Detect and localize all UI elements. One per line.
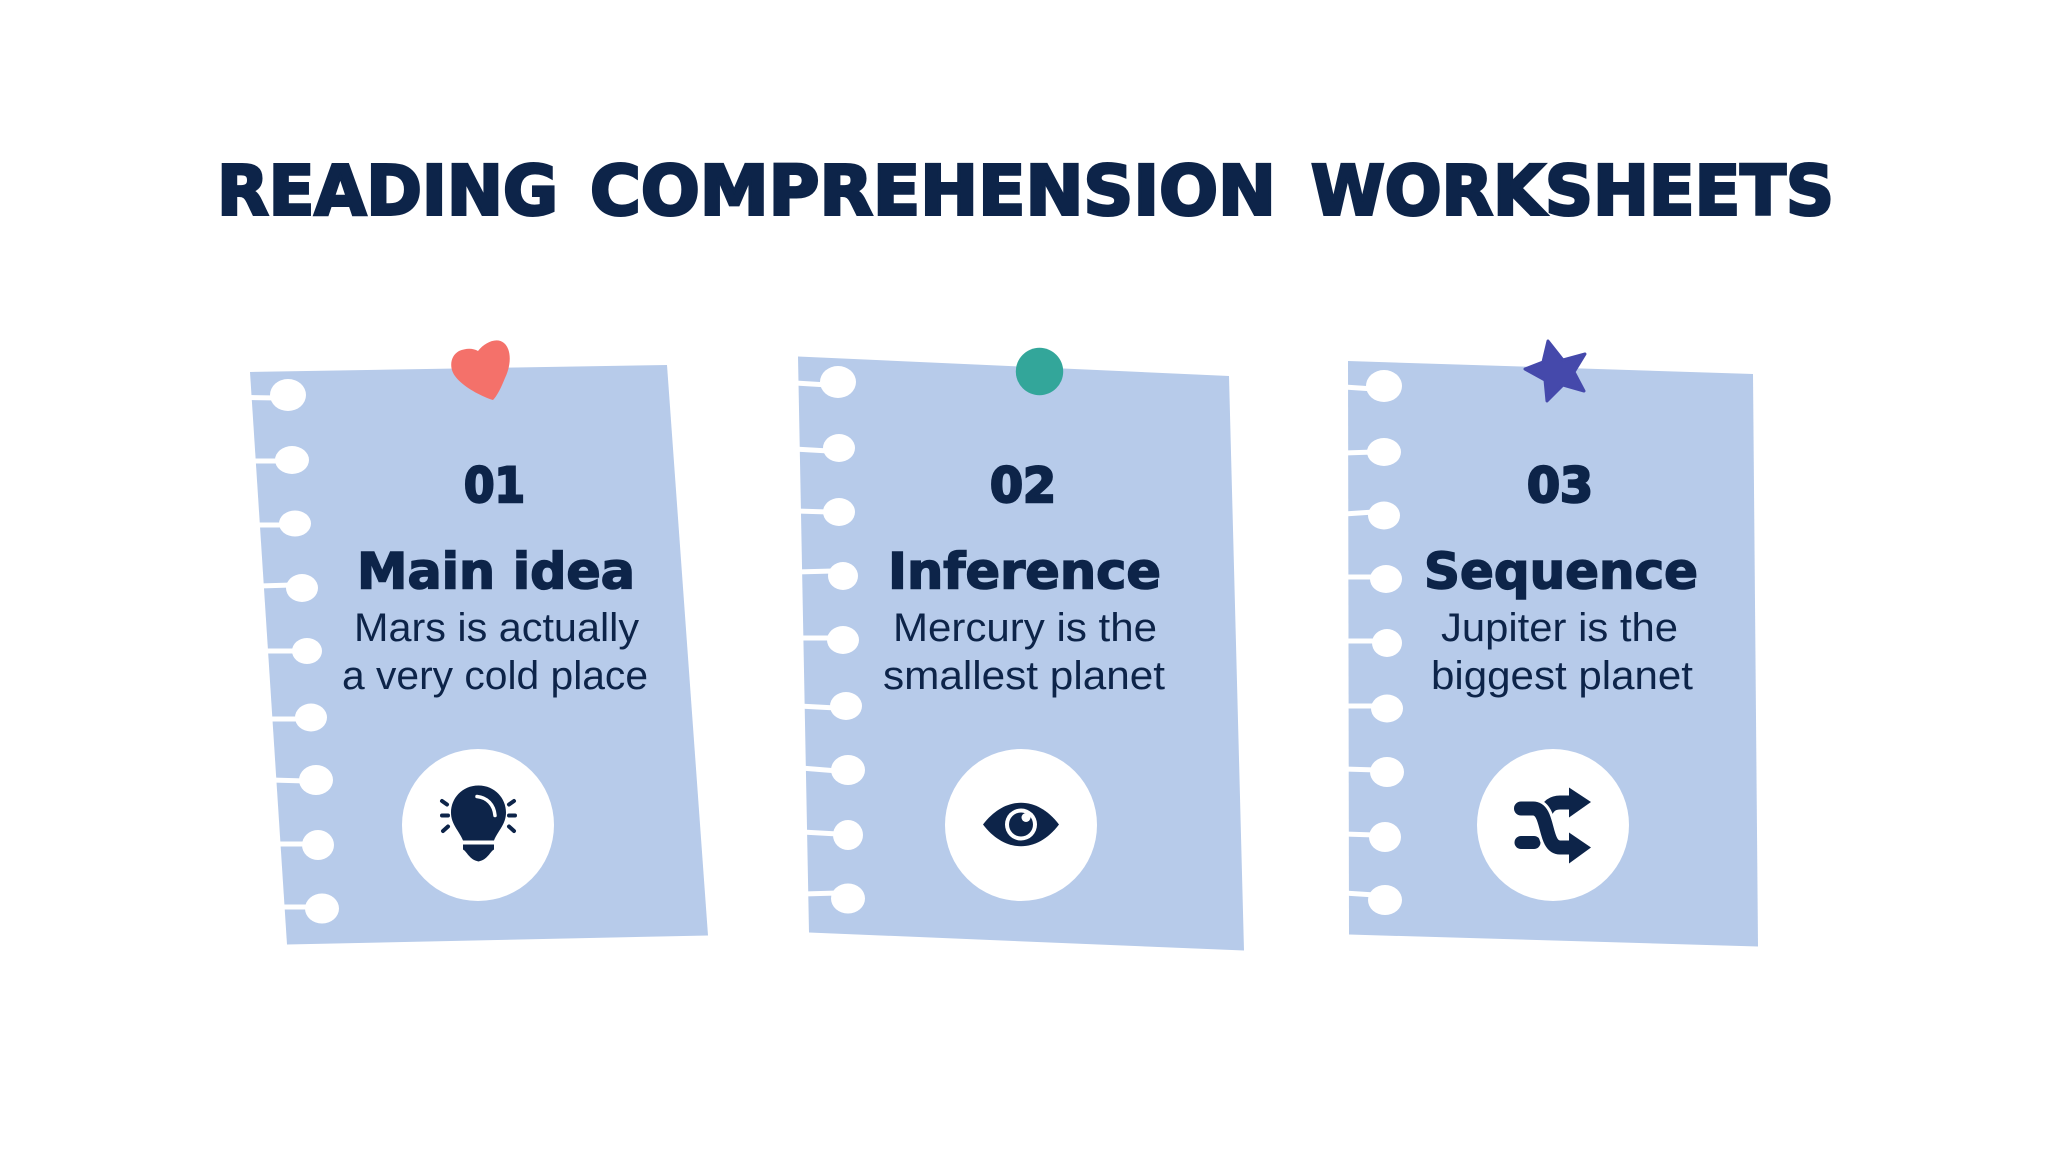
- panel: card 01 main idea: [248, 340, 708, 944]
- panel: card 03 sequence: [1344, 341, 1758, 946]
- icon: teal circle pin: [1016, 348, 1063, 395]
- description 2: smallest planet: [883, 654, 1165, 698]
- icon: light bulb in circle: [402, 749, 554, 901]
- heading: sequence: Sequence: [1424, 542, 1698, 600]
- description 1: a very cold place: [342, 654, 648, 698]
- description 2: Mercury is the: [893, 606, 1157, 650]
- icon: star pin: [1525, 341, 1585, 401]
- heading: inference: Inference: [888, 542, 1161, 600]
- description 1: [342, 606, 648, 698]
- number 01: 01: [464, 458, 525, 514]
- description 3: Jupiter is the: [1441, 606, 1678, 650]
- description 3: [1431, 606, 1693, 698]
- title: READING: [217, 152, 558, 232]
- number 03: 03: [1527, 458, 1593, 514]
- description 2: [883, 606, 1165, 698]
- description 1: Mars is actually: [354, 606, 639, 650]
- binder holes 2: [794, 366, 865, 914]
- description 3: biggest planet: [1431, 654, 1693, 698]
- title: COMPREHENSION: [590, 152, 1276, 232]
- paper sheet 3: [1348, 361, 1758, 946]
- icon: shuffle arrows in circle: [1477, 749, 1629, 901]
- binder holes 1: [248, 379, 339, 924]
- title: WORKSHEETS: [1311, 152, 1834, 232]
- panel: card 02 inference: [794, 348, 1244, 950]
- icon: eye in circle: [945, 749, 1097, 901]
- heading: main idea: Main idea: [357, 542, 635, 600]
- icon: heart pin: [451, 340, 510, 400]
- title: [217, 152, 1834, 232]
- number 02: 02: [990, 458, 1056, 514]
- paper sheet 1: [250, 365, 708, 944]
- binder holes 3: [1344, 370, 1404, 915]
- paper sheet 2: [798, 356, 1244, 950]
